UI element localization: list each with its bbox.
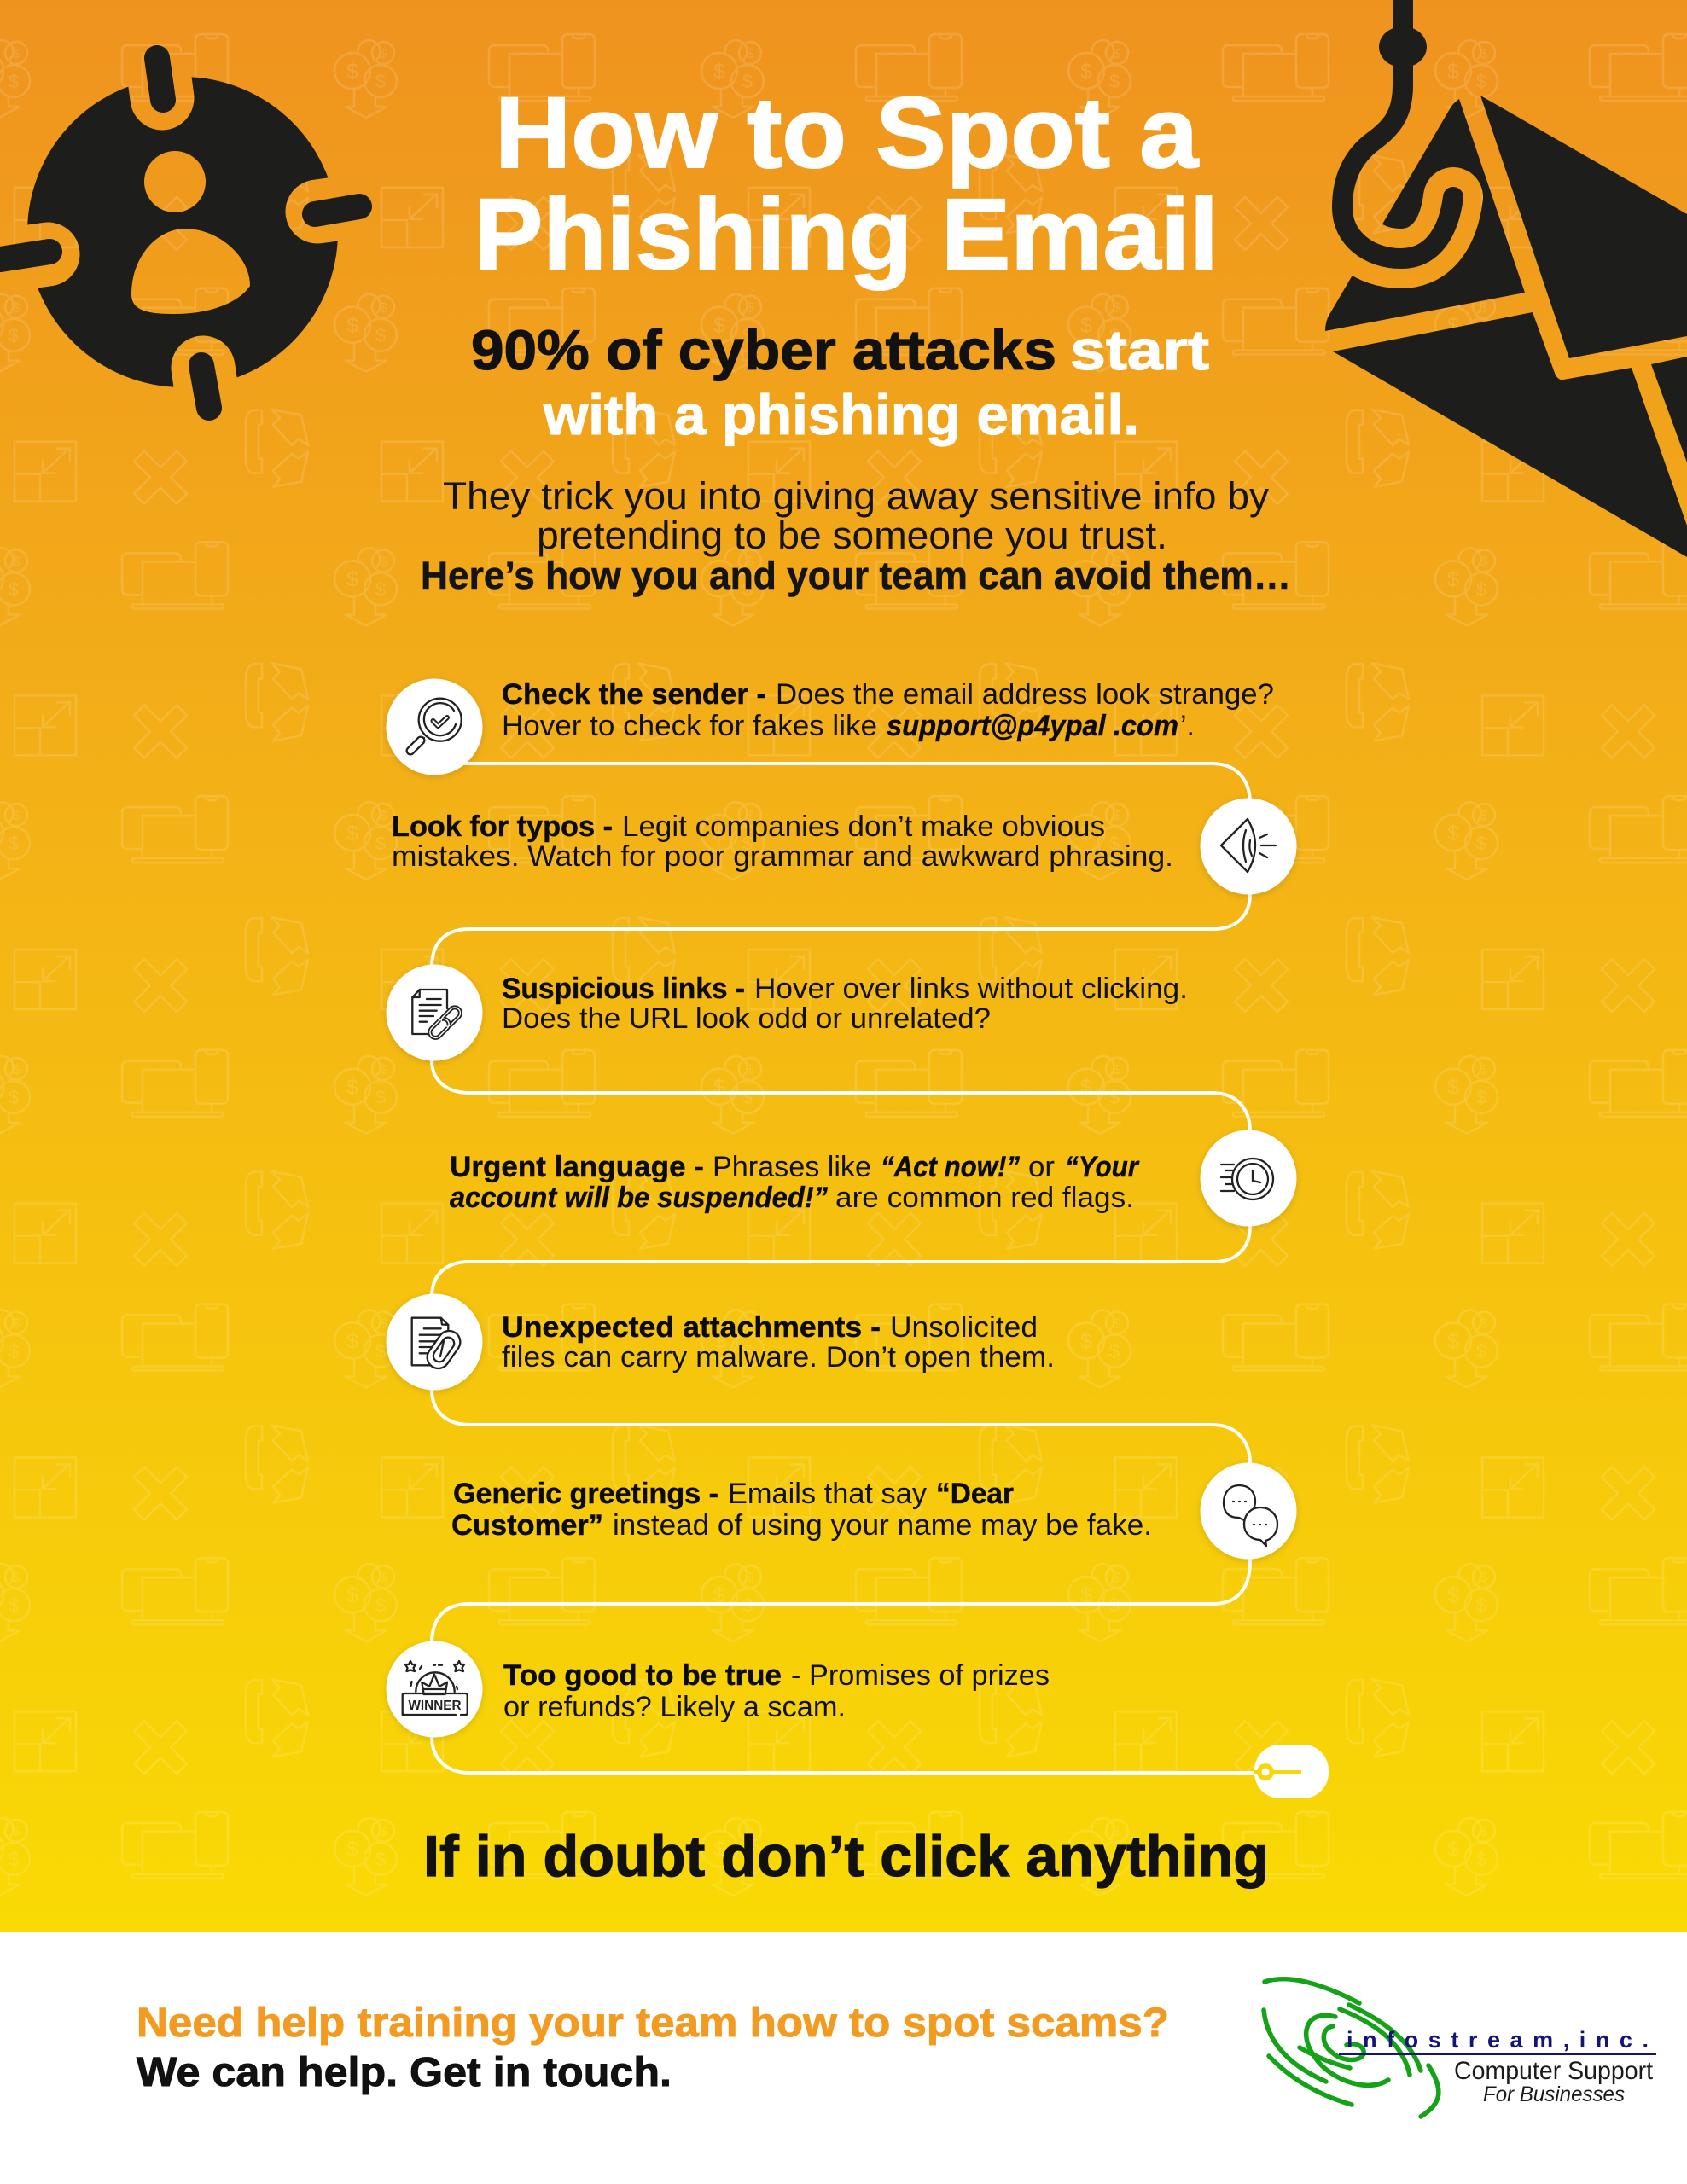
step 1: check the sender [386,678,1274,775]
step 7: too good to be true: - Promises of prizes [791,1659,1050,1692]
step 3: suspicious links: Hover over links without clicking. [754,973,1188,1005]
step 4: urgent language [450,1130,1297,1227]
step 6: generic greetings: Customer” [451,1509,603,1542]
step 5: unexpected attachments: Unexpected attachments - [502,1311,881,1344]
logo: infostream: infostream,inc. [1347,2027,1649,2053]
step 3: suspicious links [386,964,1188,1061]
logo: infostream: For Businesses [1483,2082,1625,2106]
step 6: generic greetings: instead of using your name may be fake. [613,1509,1152,1542]
step 1: check the sender: Check the sender - [502,678,766,711]
connector path [432,764,1263,1773]
subheading: with a phishing email. [543,383,1139,446]
intro paragraph [421,474,1291,597]
step 3: suspicious links: Suspicious links - [502,973,745,1005]
step 4: urgent language: are common red flags. [835,1182,1134,1214]
step 1: check the sender: Does the email address look strange? [776,678,1274,711]
icon: fast clock [1200,1130,1297,1227]
icon: eye [1200,799,1297,894]
icon: winner badge: WINNER [408,1699,462,1713]
footer text: Need help training your team how to spot scams? [137,2001,1169,2046]
step 1: check the sender: ’. [1180,710,1195,742]
step 4: urgent language: “Act now!” [881,1151,1020,1183]
step 2: look for typos: mistakes. Watch for poor grammar and awkward phrasing. [392,840,1173,873]
footer panel [0,1932,1687,2184]
step 3: suspicious links: Does the URL look odd or unrelated? [502,1002,991,1035]
step 4: urgent language: Phrases like [713,1151,871,1183]
icon: document with paperclip [386,1293,483,1391]
step 1: check the sender: Hover to check for fakes like [502,710,877,742]
step 6: generic greetings [451,1462,1297,1560]
step 2: look for typos [392,799,1297,894]
step 4: urgent language: account will be suspended!” [450,1182,828,1214]
title [474,77,1219,291]
icon: target with person [0,51,367,418]
step 6: generic greetings: “Dear [936,1478,1014,1510]
step 5: unexpected attachments [386,1293,1055,1391]
icon: computer mouse [1254,1745,1329,1798]
step 5: unexpected attachments: files can carry malware. Don’t open them. [502,1341,1055,1374]
subheading [471,318,1209,446]
intro paragraph: They trick you into giving away sensitive info by [443,474,1269,518]
step 2: look for typos: Legit companies don’t make obvious [622,810,1105,843]
step 1: check the sender: support@p4ypal .com [887,710,1178,742]
icon: chat bubbles [1200,1462,1297,1560]
icon: winner badge [386,1641,483,1737]
step 4: urgent language: “Your [1065,1151,1140,1183]
title: Phishing Email [474,178,1219,291]
footer text [137,2001,1169,2095]
step 7: too good to be true: or refunds? Likely a scam. [503,1691,846,1723]
step 4: urgent language: or [1028,1151,1055,1183]
icon: fish hook and envelope [1325,0,1687,557]
step 6: generic greetings: Generic greetings - [453,1478,718,1510]
icon: document with chain [386,964,483,1061]
title: How to Spot a [495,77,1199,189]
intro paragraph: Here’s how you and your team can avoid them… [421,554,1291,597]
logo: infostream: Computer Support [1454,2057,1654,2085]
call to action heading: If in doubt don’t click anything [423,1824,1269,1889]
subheading: 90% of cyber attacks [471,318,1056,381]
intro paragraph: pretending to be someone you trust. [537,514,1167,557]
step 5: unexpected attachments: Unsolicited [890,1311,1038,1344]
step 6: generic greetings: Emails that say [728,1478,927,1510]
step 4: urgent language: Urgent language - [450,1151,704,1183]
subheading: start [1070,318,1209,381]
step 7: too good to be true: Too good to be true [503,1659,782,1692]
icon: magnifier [386,679,483,775]
footer text: We can help. Get in touch. [137,2050,672,2095]
logo: infostream [1264,1979,1656,2117]
step 7: too good to be true [386,1641,1050,1737]
step 2: look for typos: Look for typos - [392,810,613,843]
